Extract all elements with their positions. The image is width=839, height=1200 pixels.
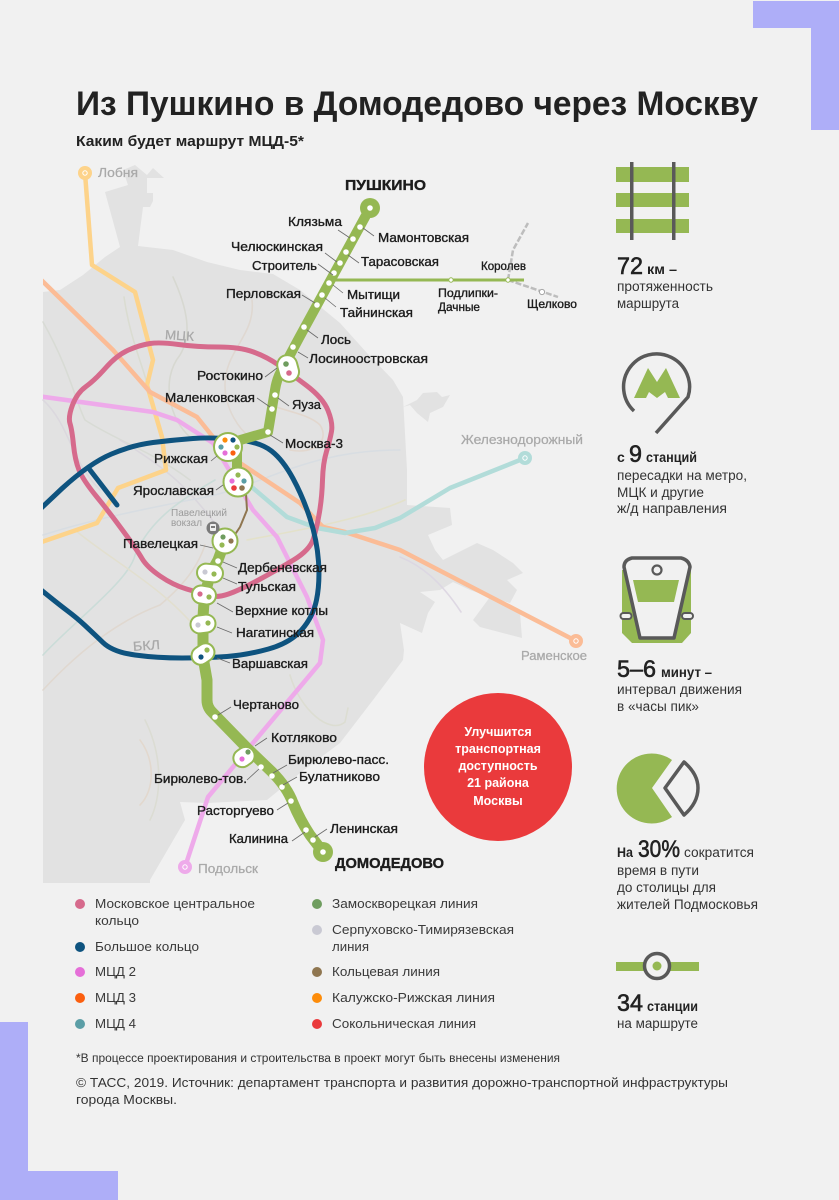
- interchange: Paveletskaya: [212, 528, 238, 554]
- ring: Big circle line: [35, 438, 319, 658]
- stat: interchange stations: [617, 354, 747, 516]
- station labels: Варшавская: [232, 656, 308, 671]
- station labels: Мамонтовская: [378, 230, 469, 245]
- interchange: Rostokino: [275, 353, 301, 384]
- legend: МЦД 2: [95, 964, 136, 979]
- faint background metro lines: [43, 277, 461, 820]
- station labels: Подольск: [198, 861, 258, 876]
- station labels: Челюскинская: [231, 239, 323, 254]
- station labels: Маленковская: [165, 390, 255, 405]
- stat: route length: км –: [647, 261, 677, 277]
- ring: MCC: [69, 343, 332, 596]
- corner bracket: top right: [753, 1, 839, 130]
- leader lines: [200, 228, 374, 841]
- legend: Большое кольцо: [95, 939, 199, 954]
- station labels: ПУШКИНО: [345, 177, 426, 194]
- station labels: Тульская: [238, 579, 296, 594]
- station labels: Павелецкий: [171, 507, 227, 519]
- stat: travel time reduction: до столицы для: [617, 880, 716, 895]
- legend: Калужско-Рижская линия: [332, 990, 495, 1005]
- station labels: Ярославская: [133, 483, 214, 498]
- station labels: Лобня: [98, 165, 138, 180]
- map: Moscow area and transit lines: [30, 165, 587, 883]
- station labels: Щелково: [527, 297, 577, 311]
- callout: transport accessibility: [424, 693, 572, 841]
- station labels: Москва-3: [285, 436, 343, 451]
- source: города Москвы.: [76, 1092, 177, 1107]
- stat: interchange stations: ж/д направления: [617, 501, 727, 516]
- stat: travel time reduction: жителей Подмосковья: [617, 897, 758, 912]
- legend: [75, 896, 514, 1031]
- station dots: [212, 205, 373, 855]
- legend: Кольцевая линия: [332, 964, 440, 979]
- callout: transport accessibility: доступность: [458, 759, 538, 773]
- Korolev branch dashed lines: [508, 223, 558, 297]
- station labels: Бирюлево-пасс.: [288, 752, 389, 767]
- station labels: Ростокино: [197, 368, 263, 383]
- icon: rails: [616, 162, 689, 240]
- footnote: *В процессе проектирования и строительства в проект могут быть внесены изменения: [76, 1053, 560, 1065]
- icon: metro pin: [624, 354, 690, 433]
- station labels: Нагатинская: [236, 625, 314, 640]
- station labels: Тарасовская: [361, 254, 439, 269]
- terminal: Lobnya: [78, 166, 92, 180]
- terminal: Pushkino: [360, 198, 380, 218]
- station labels: Бирюлево-тов.: [154, 771, 247, 786]
- line: Podolsk (MCD 2): [30, 395, 323, 867]
- interchange: Tulskaya: [196, 563, 224, 583]
- station labels: БКЛ: [132, 637, 160, 654]
- station labels: Тайнинская: [340, 305, 413, 320]
- station labels: Строитель: [252, 258, 317, 273]
- interchange: Kotlyakovo: [230, 743, 258, 771]
- station labels: Подлипки-: [438, 286, 498, 300]
- title: Из Пушкино в Домодедово через Москву: [76, 85, 758, 123]
- line: Zheleznodorozhny: [247, 458, 525, 533]
- station labels: Перловская: [226, 286, 301, 301]
- station labels: [98, 165, 587, 876]
- station labels: Ленинская: [330, 821, 398, 836]
- branch of big circle line: [90, 470, 117, 505]
- stat: peak interval: [617, 558, 742, 714]
- MCD-5 branch: [335, 278, 524, 282]
- corner bracket: bottom left: [0, 1022, 118, 1200]
- legend: Замоскворецкая линия: [332, 896, 478, 911]
- stat: travel time reduction: сократится: [684, 845, 754, 860]
- station labels: Железнодорожный: [461, 432, 583, 447]
- stat: route length: [616, 162, 713, 311]
- stat: number of stations: станции: [647, 998, 698, 1014]
- stat: interchange stations: 9: [629, 441, 642, 468]
- stat: peak interval: минут –: [661, 664, 712, 680]
- station labels: Королев: [481, 259, 526, 273]
- stat: interchange stations: с: [617, 449, 625, 465]
- station labels: Булатниково: [299, 769, 380, 784]
- station labels: Расторгуево: [197, 803, 274, 818]
- legend: МЦД 4: [95, 1016, 136, 1031]
- station labels: Рижская: [154, 451, 208, 466]
- stat: interchange stations: станций: [646, 449, 697, 465]
- station labels: Калинина: [229, 831, 289, 846]
- callout: transport accessibility: Москвы: [473, 794, 523, 808]
- stat: number of stations: на маршруте: [617, 1016, 698, 1031]
- legend: кольцо: [95, 913, 139, 928]
- callout: transport accessibility: транспортная: [455, 742, 541, 756]
- legend: Сокольническая линия: [332, 1016, 476, 1031]
- icon: station on line: [616, 954, 699, 978]
- terminal: Podolsk: [178, 860, 192, 874]
- stat: route length: протяженность: [617, 279, 713, 294]
- terminal: Ramenskoye: [569, 634, 583, 648]
- stat: number of stations: 34: [617, 990, 643, 1017]
- stat: interchange stations: МЦК и другие: [617, 485, 704, 500]
- subtitle: Каким будет маршрут МЦД-5*: [76, 133, 304, 150]
- stat: peak interval: в «часы пик»: [617, 699, 699, 714]
- icon: train front: [620, 558, 693, 643]
- interchange: Varshavskaya: [188, 640, 218, 668]
- stat: peak interval: интервал движения: [617, 682, 742, 697]
- map background: Moscow territory: [43, 165, 523, 883]
- station labels: Клязьма: [288, 214, 343, 229]
- source: [76, 1075, 728, 1107]
- station labels: Лосиноостровская: [309, 351, 428, 366]
- stat: route length: маршрута: [617, 296, 679, 311]
- stat: route length: 72: [617, 253, 643, 280]
- station labels: Яуза: [292, 397, 322, 412]
- stat: interchange stations: пересадки на метро,: [617, 468, 747, 483]
- icon: Paveletsky station: [206, 522, 220, 534]
- main MCD-5 route south: [203, 541, 323, 852]
- stat: travel time reduction: 30%: [638, 836, 680, 863]
- station labels: Павелецкая: [123, 536, 198, 551]
- stat: travel time reduction: [617, 754, 758, 912]
- line: Ramenskoye: [30, 269, 576, 641]
- legend: линия: [332, 939, 369, 954]
- station labels: Котляково: [271, 730, 337, 745]
- callout: transport accessibility: 21 района: [467, 776, 530, 790]
- station labels: Чертаново: [233, 697, 299, 712]
- station labels: вокзал: [171, 517, 202, 529]
- stat: number of stations: [616, 954, 699, 1031]
- stat: travel time reduction: На: [617, 844, 633, 860]
- legend: Московское центральное: [95, 896, 255, 911]
- terminal: Domodedovo: [313, 842, 333, 862]
- station labels: Лось: [321, 332, 351, 347]
- line: Lobnya: [30, 173, 166, 546]
- interchange: Nagatinskaya: [189, 614, 217, 634]
- interchange: Verkhnie Kotly: [191, 584, 217, 606]
- interchange: Rizhskaya: [214, 433, 242, 461]
- station labels: Дачные: [438, 300, 480, 314]
- interchange: Yaroslavskaya: [224, 468, 252, 496]
- callout: transport accessibility: Улучшится: [464, 725, 532, 739]
- main MCD-5 route: [230, 208, 370, 477]
- station labels: Дербеневская: [238, 560, 327, 575]
- stat: travel time reduction: время в пути: [617, 863, 699, 878]
- station labels: ДОМОДЕДОВО: [335, 855, 444, 872]
- source: © ТАСС, 2019. Источник: департамент транспорта и развития дорожно-транспортной инфраструктуры: [76, 1075, 728, 1090]
- legend: МЦД 3: [95, 990, 136, 1005]
- station labels: Верхние котлы: [235, 603, 328, 618]
- stat: peak interval: 5–6: [617, 656, 656, 683]
- ring line: brown link: [234, 494, 247, 536]
- legend: Серпуховско-Тимирязевская: [332, 922, 514, 937]
- station labels: Мытищи: [347, 287, 400, 302]
- icon: pie with cut sector: [617, 754, 698, 824]
- station labels: Раменское: [521, 648, 587, 663]
- station labels: МЦК: [165, 327, 195, 344]
- terminal: Zheleznodorozhny: [518, 451, 532, 465]
- branch stations: [449, 278, 545, 295]
